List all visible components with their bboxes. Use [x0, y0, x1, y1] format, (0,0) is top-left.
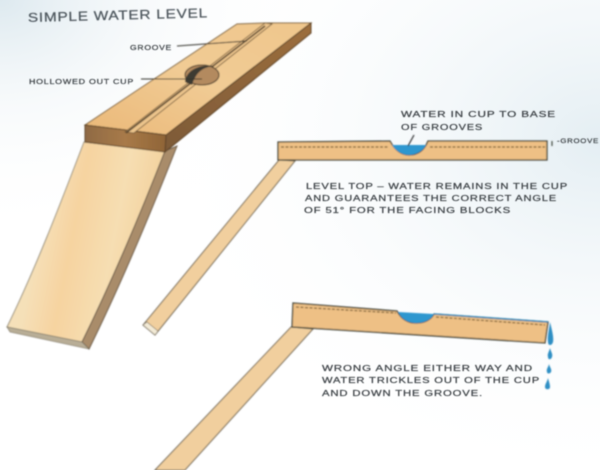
illustration: large perspective water level [7, 23, 311, 349]
hollowed out cup label: HOLLOWED OUT CUP [29, 79, 134, 86]
arrow to water [408, 135, 414, 146]
leader lines [141, 41, 247, 79]
wrong angle caption: AND DOWN THE GROOVE. [322, 389, 483, 398]
illustration: level top side view [143, 135, 552, 335]
level top caption: LEVEL TOP – WATER REMAINS IN THE CUP [306, 182, 568, 191]
water label [401, 110, 556, 132]
groove dashed lines [296, 307, 545, 325]
illustration: wrong angle side view [155, 303, 553, 470]
groove label: GROOVE [130, 45, 172, 52]
water drips [545, 322, 553, 389]
lower leg: board front face [7, 142, 165, 342]
plank with cup [292, 303, 548, 343]
level top caption: AND GUARANTEES THE CORRECT ANGLE [305, 194, 557, 203]
title: SIMPLE WATER LEVEL [28, 6, 208, 25]
strut end [143, 322, 158, 335]
strut [143, 160, 295, 335]
lower leg: board side edge [82, 146, 177, 349]
groove dashed lines [281, 146, 545, 148]
plank with cup [278, 141, 547, 160]
top board: side edge [165, 23, 311, 152]
groove side label: -GROOVE [557, 138, 599, 145]
level top caption: OF 51° FOR THE FACING BLOCKS [304, 206, 511, 215]
water trickle along groove [434, 314, 548, 322]
water in cup [398, 312, 434, 323]
wrong angle caption: WRONG ANGLE EITHER WAY AND [322, 364, 533, 373]
top board: upper face [85, 23, 311, 135]
groove [125, 23, 272, 133]
strut [155, 327, 313, 470]
top board: end face [85, 125, 166, 152]
water label: OF GROOVES [401, 123, 483, 132]
wrong angle caption [322, 364, 540, 398]
groove tick [551, 141, 553, 146]
water in cup [392, 145, 426, 155]
wrong angle caption: WATER TRICKLES OUT OF THE CUP [322, 376, 540, 385]
lower leg: bottom edge [7, 327, 89, 349]
hollowed out cup [185, 65, 219, 85]
level top caption [304, 182, 568, 215]
water label: WATER IN CUP TO BASE [401, 110, 556, 119]
